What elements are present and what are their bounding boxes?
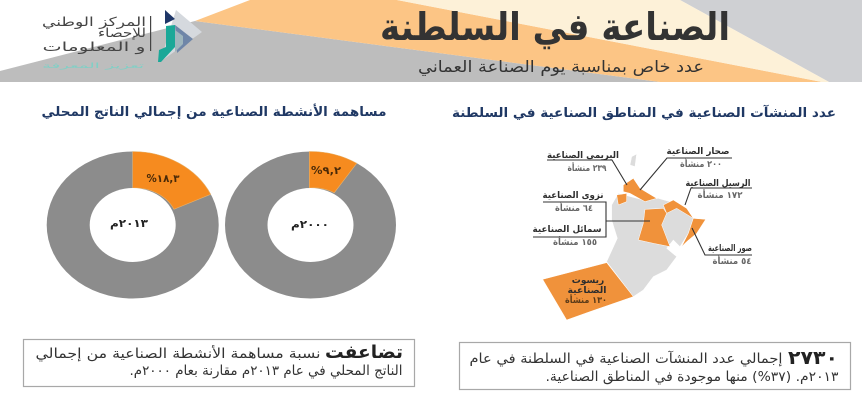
callout: Sohar: ٢٠٠ منشأة [680,158,722,170]
callout: Raysut [565,276,607,306]
callout box: GDP doubled: نسبة مساهمة الأنشطة الصناعية من إجمالي [36,345,320,362]
logo name: المركز الوطني [42,14,146,30]
callout: Rusayl: الرسيل الصناعية [686,179,750,189]
year label: ٢٠١٣م [110,217,148,230]
donut chart 2000 [225,151,396,298]
heading: GDP contribution: مساهمة الأنشطة الصناعية من إجمالي الناتج المحلي [42,103,386,120]
logo divider [150,16,151,51]
logo name: للإحصاء [98,25,146,40]
year label: ٢٠٠٠م [291,218,329,231]
callout box: GDP doubled: تضاعفت [325,342,403,363]
callout box: total establishments: إجمالي عدد المنشآت الصناعية في السلطنة في عام [470,350,782,367]
callout box: GDP doubled [24,340,414,386]
callout: Sohar [640,147,732,190]
icon: logo mark [158,10,202,62]
callout: Nizwa and Samail: سمائل الصناعية [532,225,602,235]
subtitle: عدد خاص بمناسبة يوم الصناعة العماني [418,57,704,77]
callout box: total establishments: ٢٠١٣م. (٣٧%) منها موجودة في المناطق الصناعية. [546,369,838,385]
callout: Buraimi: البريمي الصناعية [547,151,619,161]
callout: Raysut: ١٣٠ منشأة [565,294,607,306]
callout box: GDP doubled: الناتج المحلي في عام ٢٠١٣م مقارنة بعام ٢٠٠٠م. [130,363,402,379]
logo: national centre for statistics and information [42,10,202,70]
value label: ٩,٢% [311,165,342,177]
callout: Rusayl: ١٧٢ منشأة [698,189,743,201]
title: الصناعة في السلطنة [380,5,730,49]
callout: Buraimi: ٢٣٩ منشأة [568,162,607,174]
callout: Sur: ٥٤ منشأة [712,255,752,267]
callout: Rusayl [685,179,752,205]
callout: Sur: صور الصناعية [708,244,752,254]
logo name [42,14,146,55]
logo name: و المعلومات [42,39,146,55]
callout: Raysut: ريسوت [572,276,604,286]
map regions [543,154,706,320]
donut chart 2013 [47,152,219,298]
callout: Raysut: الصناعية [568,286,606,296]
value label: ١٨,٣% [146,173,180,185]
callout: Buraimi [547,151,627,185]
callout: Nizwa and Samail [532,191,650,248]
callout: Sur [692,228,752,267]
logo tagline: تعزيز المعرفة [42,62,144,70]
callout: Nizwa and Samail: ١٥٥ منشأة [553,236,597,248]
callout: Nizwa and Samail: نزوى الصناعية [542,191,604,201]
callout box: total establishments [460,342,850,390]
callout: Nizwa and Samail: ٦٤ منشأة [555,202,593,214]
map of Oman [532,147,752,320]
callout box: total establishments: ٢٧٣٠ [788,347,838,369]
heading: establishments: عدد المنشآت الصناعية في المناطق الصناعية في السلطنة [452,104,836,121]
header banner background [0,0,862,82]
callout: Sohar: صحار الصناعية [666,147,730,157]
